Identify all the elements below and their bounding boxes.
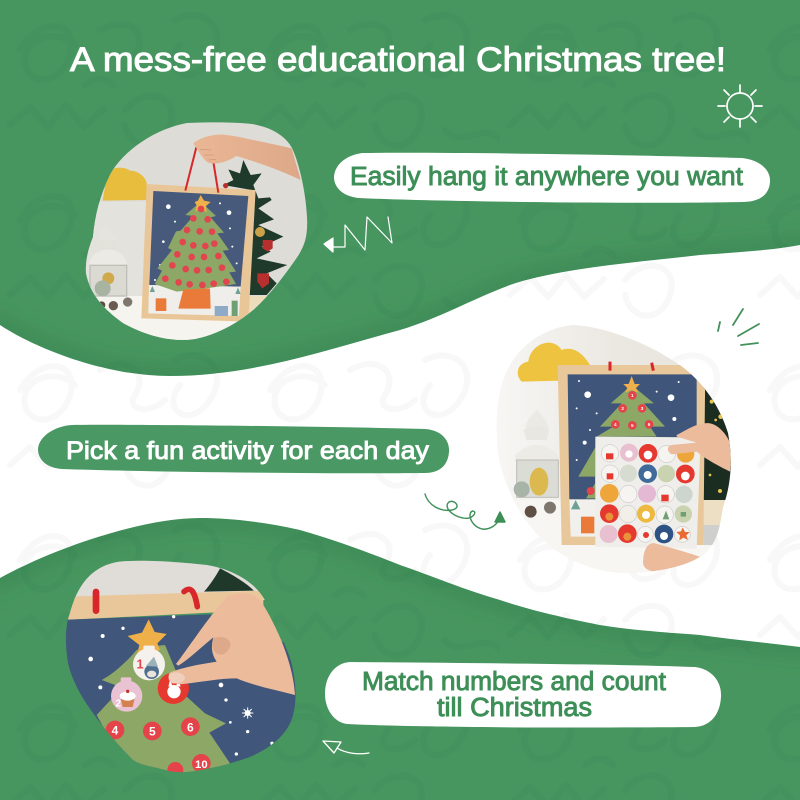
pine cones bbox=[525, 506, 537, 518]
sticker sheet bbox=[595, 437, 701, 549]
lantern bbox=[514, 410, 558, 497]
sticker 1 penguin bbox=[133, 646, 165, 680]
label pill: hang it anywhere: Easily hang it anywhere you want bbox=[350, 163, 743, 191]
hands bbox=[668, 423, 732, 472]
star bbox=[128, 619, 167, 657]
icon: green burst rays bbox=[718, 309, 759, 345]
label pill: pick an activity bbox=[38, 425, 449, 473]
wooden frame bbox=[558, 365, 705, 545]
presents bbox=[156, 298, 166, 311]
day circles: 10 bbox=[195, 759, 208, 771]
wooden frame bbox=[141, 184, 256, 322]
snow bbox=[154, 202, 238, 281]
arrow: zigzag bbox=[324, 217, 392, 252]
snow bbox=[88, 615, 274, 756]
sticker 2 cupcake: 2 bbox=[116, 699, 122, 710]
day circles: 6 bbox=[187, 720, 194, 734]
table bbox=[96, 296, 267, 340]
background tree bbox=[223, 160, 287, 295]
day circles bbox=[162, 206, 230, 288]
board bbox=[149, 191, 248, 287]
title: A mess-free educational Christmas tree! bbox=[70, 41, 726, 79]
tree bbox=[597, 385, 665, 437]
day circles bbox=[587, 391, 653, 495]
tree bbox=[155, 202, 236, 292]
sticker 3 bunny bbox=[158, 673, 189, 704]
yellow cloud bbox=[103, 168, 147, 201]
ropes bbox=[610, 362, 653, 371]
day circles: 6 bbox=[648, 422, 651, 427]
yellow cloud bbox=[518, 343, 590, 382]
red ribbon bbox=[185, 146, 218, 193]
wooden bar bbox=[63, 591, 263, 620]
icon: sun bbox=[718, 85, 762, 127]
photo: sticker sheet bbox=[497, 325, 731, 573]
table bbox=[563, 545, 712, 573]
day circles: 4 bbox=[614, 422, 617, 427]
label pill: match numbers: till Christmas bbox=[437, 694, 592, 722]
sticker 2 cupcake bbox=[111, 677, 142, 712]
board bbox=[568, 374, 697, 499]
photo: placing stickers on tree bbox=[66, 560, 296, 772]
snow bbox=[576, 380, 688, 461]
day circles: 5 bbox=[149, 725, 156, 739]
sticker 1 penguin: 1 bbox=[136, 657, 144, 671]
board bbox=[66, 614, 296, 772]
arrow: curved white bbox=[323, 741, 369, 754]
label pill: hang it anywhere bbox=[334, 153, 770, 203]
label pill: pick an activity: Pick a fun activity for each day bbox=[66, 437, 430, 465]
photo: hanging the board bbox=[86, 122, 308, 340]
stickers bbox=[600, 444, 695, 543]
tree tips bbox=[204, 568, 254, 592]
white wave band bbox=[0, 245, 800, 647]
day circles: 1 bbox=[631, 393, 634, 398]
tree behind bbox=[703, 387, 731, 500]
hand and arm bbox=[193, 135, 301, 180]
lantern bbox=[89, 264, 128, 297]
label pill: match numbers: Match numbers and count bbox=[362, 668, 666, 696]
label pill: match numbers bbox=[325, 662, 721, 728]
day circles: 3 bbox=[641, 406, 644, 411]
tree bbox=[97, 645, 230, 777]
pine cones bbox=[100, 301, 106, 308]
day circles bbox=[106, 717, 211, 778]
arrow: curly bbox=[425, 494, 505, 529]
hand bbox=[169, 593, 295, 695]
ropes bbox=[92, 588, 100, 614]
day circles: 4 bbox=[112, 724, 119, 738]
day circles: 2 bbox=[621, 406, 624, 411]
day circles: 5 bbox=[631, 423, 634, 428]
